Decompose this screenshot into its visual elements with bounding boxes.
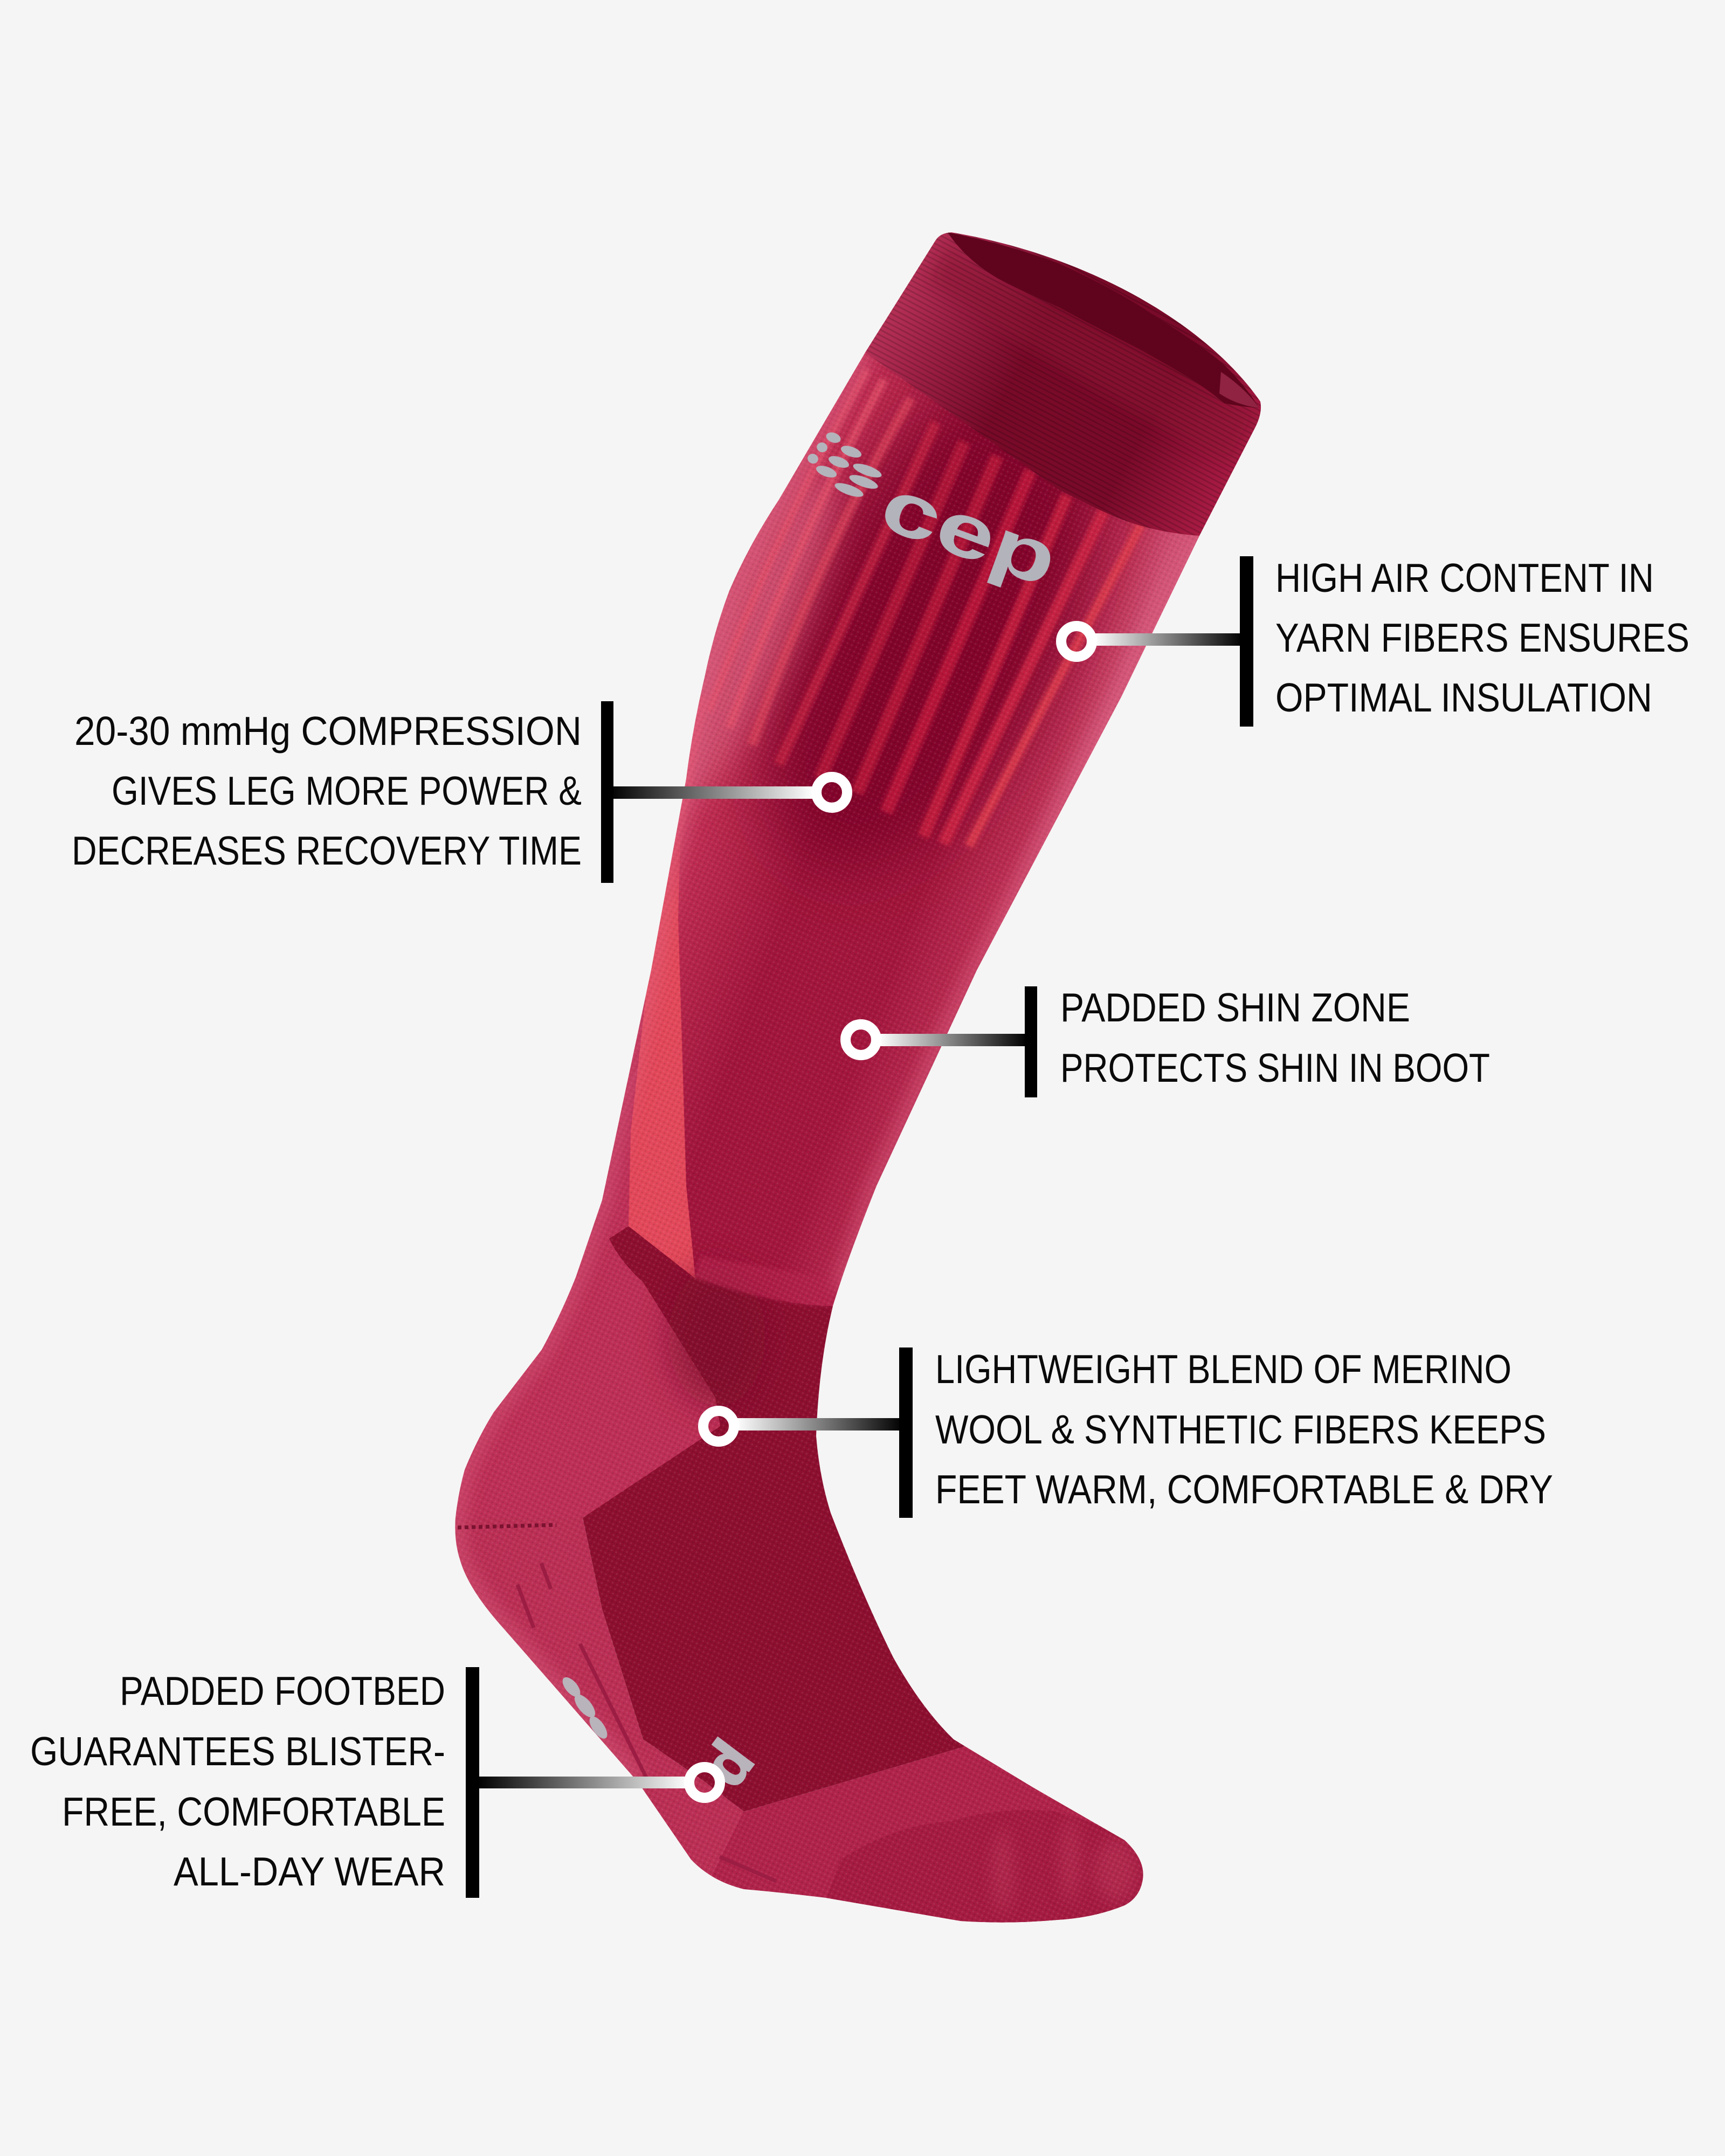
cuff upper lighter band <box>927 245 1259 464</box>
text: 20-30 mmHg COMPRESSION <box>74 708 582 754</box>
marker <box>689 1767 720 1798</box>
logo wordmark: foot: p <box>698 1735 774 1804</box>
coral side panel <box>629 808 695 1279</box>
text <box>935 1346 1553 1512</box>
heel and sole <box>442 1518 744 1897</box>
text: FREE, COMFORTABLE <box>62 1789 445 1834</box>
calf stripes <box>709 370 1142 846</box>
marker <box>703 1411 734 1441</box>
text <box>30 1668 445 1894</box>
right edge highlight <box>841 536 1199 1294</box>
knit texture <box>431 323 1294 1940</box>
text: PROTECTS SHIN IN BOOT <box>1060 1045 1490 1090</box>
text: GUARANTEES BLISTER- <box>30 1729 445 1774</box>
callout: padded footbed <box>30 1667 720 1898</box>
leader line <box>879 1034 1027 1046</box>
forefoot <box>701 1746 1159 1940</box>
marker <box>816 777 847 807</box>
sock opening <box>948 232 1259 408</box>
text: GIVES LEG MORE POWER & <box>112 768 582 813</box>
bar <box>1240 556 1253 727</box>
callout: shin zone <box>845 985 1490 1097</box>
cuff ribs <box>865 232 1261 536</box>
marker <box>845 1024 877 1055</box>
sole marks <box>518 1563 776 1881</box>
bar <box>466 1667 479 1898</box>
logo wordmark: calf: cep <box>871 461 1069 603</box>
lower calf bottom edge light <box>694 1256 857 1306</box>
text: FEET WARM, COMFORTABLE & DRY <box>935 1467 1553 1512</box>
text: HIGH AIR CONTENT IN <box>1275 555 1654 600</box>
text: WOOL & SYNTHETIC FIBERS KEEPS <box>935 1407 1546 1452</box>
text: OPTIMAL INSULATION <box>1275 675 1652 720</box>
cuff <box>865 232 1261 536</box>
bar <box>1025 986 1037 1097</box>
text: LIGHTWEIGHT BLEND OF MERINO <box>935 1346 1512 1392</box>
text: ALL-DAY WEAR <box>174 1849 445 1894</box>
sock illustration <box>431 232 1294 1940</box>
leader line <box>1094 633 1243 646</box>
callout: compression <box>72 701 847 883</box>
edge highlight <box>455 353 865 1782</box>
leader line <box>477 1777 690 1788</box>
callout: merino blend <box>703 1346 1553 1518</box>
bar <box>899 1348 913 1518</box>
upper calf dark shading <box>735 396 1118 886</box>
text: DECREASES RECOVERY TIME <box>72 828 582 873</box>
calf panel <box>593 323 1294 1321</box>
text <box>1060 985 1490 1090</box>
leader line <box>609 786 814 799</box>
text: PADDED SHIN ZONE <box>1060 985 1410 1030</box>
text <box>1275 555 1689 720</box>
logo mark: sole <box>559 1674 611 1742</box>
upper calf light left side <box>685 474 846 786</box>
leader line <box>736 1418 903 1431</box>
text: PADDED FOOTBED <box>120 1668 445 1713</box>
callout: insulation <box>1061 555 1689 727</box>
opening inner rim <box>1219 372 1259 408</box>
toe cap <box>826 1810 1159 1940</box>
ankle dark zone <box>583 1226 1051 1812</box>
marker <box>1061 626 1092 657</box>
coral rim on upper calf <box>666 695 701 884</box>
heel seam <box>458 1525 556 1528</box>
ankle light band left <box>455 1081 720 1521</box>
bar <box>601 701 613 883</box>
text <box>72 708 582 873</box>
toe folds <box>993 1816 1137 1913</box>
ankle dark shading <box>668 1267 765 1407</box>
logo mark: calf <box>806 431 883 500</box>
